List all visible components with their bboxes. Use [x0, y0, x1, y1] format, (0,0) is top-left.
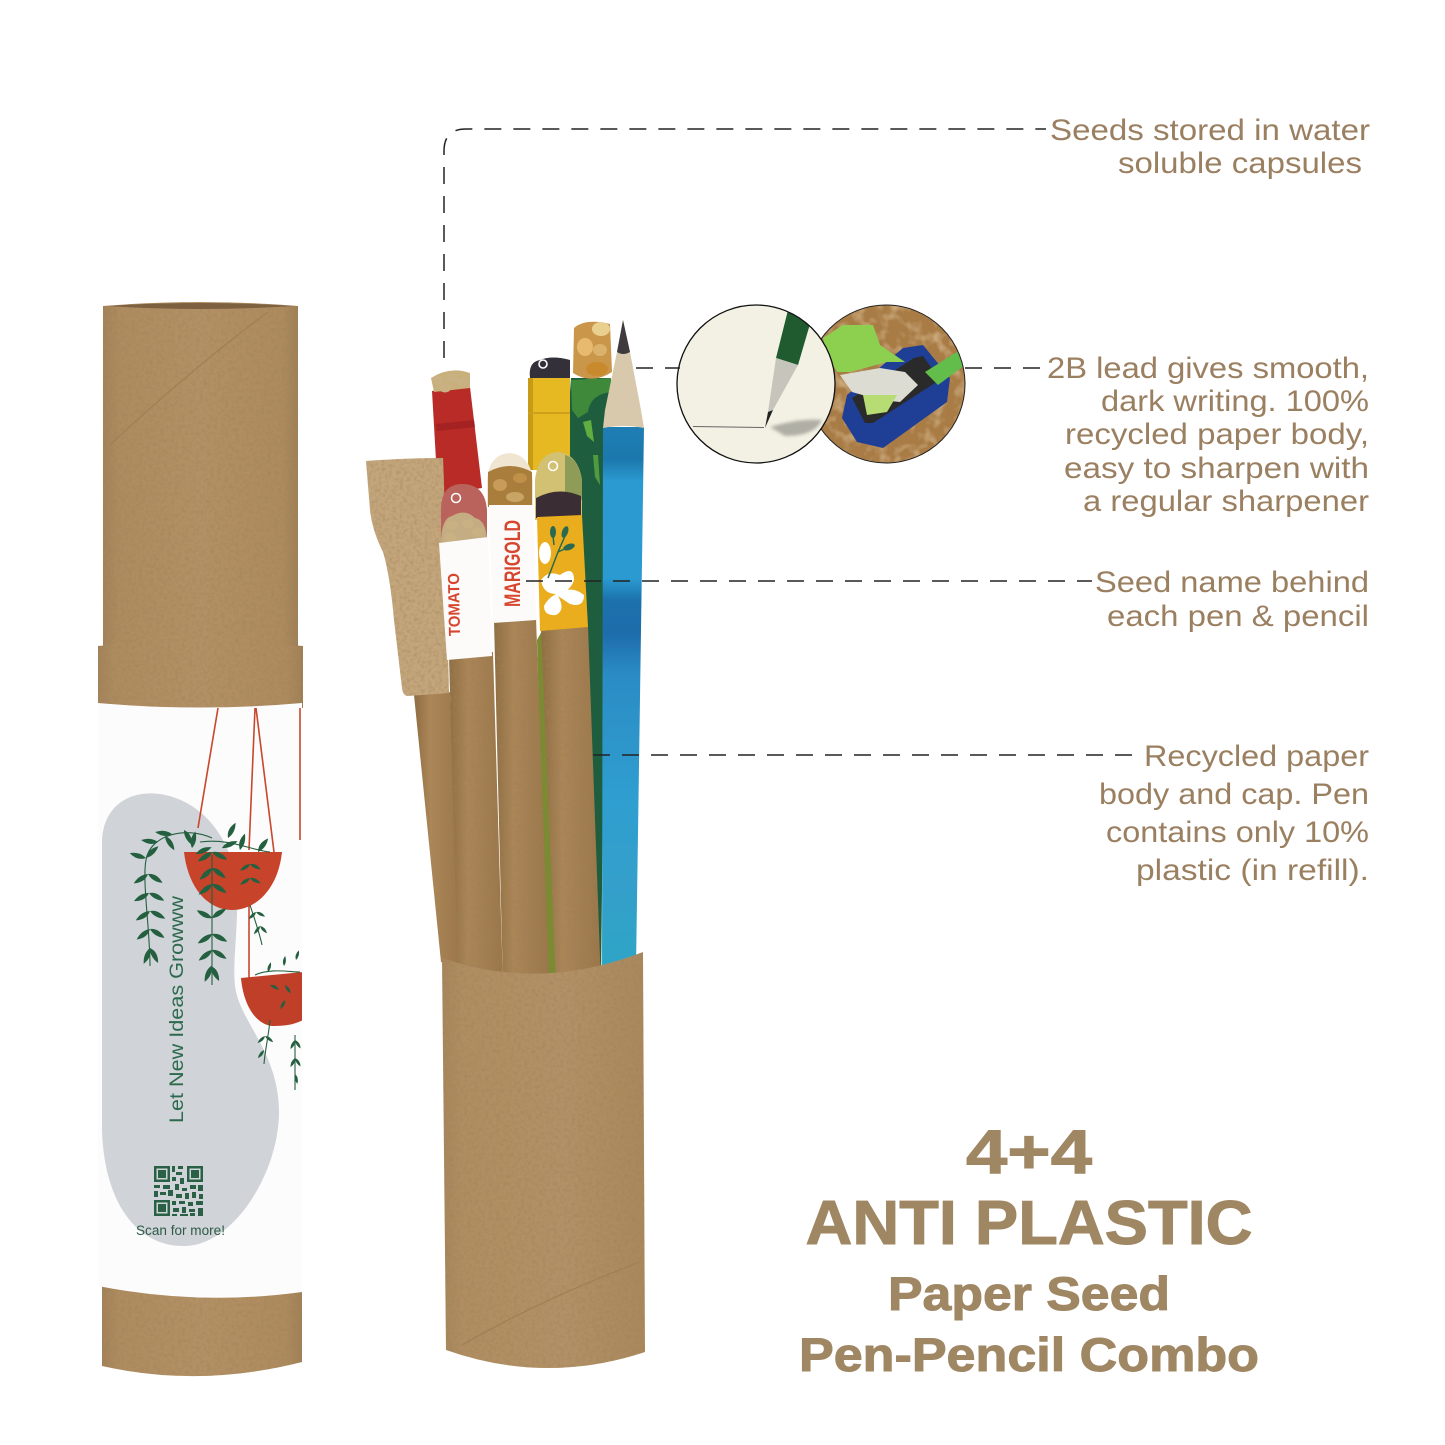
callout: 2B lead — [1047, 352, 1369, 518]
green pencil seeds — [573, 322, 612, 379]
blue pencil — [602, 320, 644, 968]
marigold capsule — [487, 453, 533, 505]
red pot one — [184, 852, 282, 910]
callout: recycled paper: Recycled paper — [1144, 740, 1369, 773]
olive sliver between pens — [537, 620, 558, 985]
tube top section — [103, 302, 298, 655]
callout: recycled paper: body and cap. Pen — [1099, 778, 1369, 811]
tomato label — [439, 537, 492, 660]
left closed tube — [98, 302, 303, 1376]
tomato pen — [439, 484, 503, 985]
marigold pen: MARIGOLD — [500, 520, 525, 607]
tomato pen: TOMATO — [446, 573, 464, 636]
callout: 2B lead: recycled paper body, — [1065, 418, 1369, 451]
callout: seeds stored — [1050, 114, 1370, 180]
open tube body — [442, 952, 645, 1368]
marigold pen — [487, 453, 549, 985]
callout: seeds stored: Seeds stored in water — [1050, 114, 1370, 147]
floral pen — [535, 452, 601, 985]
hanging ropes — [198, 708, 300, 978]
marigold label — [489, 505, 536, 623]
pencil lead — [617, 320, 630, 354]
circular inset: sharpener — [821, 304, 966, 464]
product title: 4+4 — [966, 1118, 1093, 1187]
callout: 2B lead: easy to sharpen with — [1064, 452, 1369, 485]
callout: seed name — [1095, 566, 1369, 633]
tube collar — [98, 641, 303, 708]
callout: recycled paper: plastic (in refill). — [1136, 854, 1369, 887]
product title: ANTI PLASTIC — [806, 1189, 1252, 1258]
circular inset: pencil writing — [677, 305, 835, 463]
green pencil — [548, 322, 612, 985]
product title: Paper Seed — [888, 1267, 1170, 1320]
yellow pencil — [528, 358, 570, 470]
open tube with pens and pencils — [366, 320, 645, 1368]
callout: seeds stored: soluble capsules — [1118, 147, 1362, 180]
white printed label — [98, 700, 303, 1310]
tomato capsule — [441, 484, 487, 545]
callout: 2B lead: 2B lead gives smooth, — [1047, 352, 1369, 385]
red pencil seeds — [431, 370, 470, 392]
pencil through sharpener — [925, 352, 962, 385]
plant vines — [129, 822, 302, 1090]
callout: recycled paper — [1099, 740, 1369, 887]
floral label — [537, 515, 588, 631]
callout: seed name: Seed name behind — [1095, 566, 1369, 599]
product title — [799, 1118, 1259, 1381]
grey blob — [102, 793, 279, 1246]
dashed leader lines — [444, 129, 1132, 755]
callout: 2B lead: dark writing. 100% — [1101, 385, 1369, 418]
sharpener body — [842, 345, 950, 448]
QR code — [154, 1166, 203, 1216]
red pencil — [431, 370, 482, 495]
product title: Pen-Pencil Combo — [799, 1328, 1259, 1381]
pencil wood tip — [603, 320, 644, 428]
tube bottom section — [102, 1280, 302, 1376]
kraft pen cap — [366, 458, 449, 696]
scan caption: Scan for more! — [136, 1223, 225, 1238]
callout: recycled paper: contains only 10% — [1106, 816, 1369, 849]
callout: 2B lead: a regular sharpener — [1083, 485, 1369, 518]
red pot two — [241, 972, 303, 1026]
floral capsule — [535, 452, 582, 520]
yellow pencil seeds — [530, 358, 570, 378]
paper shavings — [840, 368, 918, 402]
pen under cap — [414, 692, 461, 968]
vertical slogan: Let New Ideas Growww — [167, 896, 188, 1123]
callout: seed name: each pen & pencil — [1107, 600, 1369, 633]
